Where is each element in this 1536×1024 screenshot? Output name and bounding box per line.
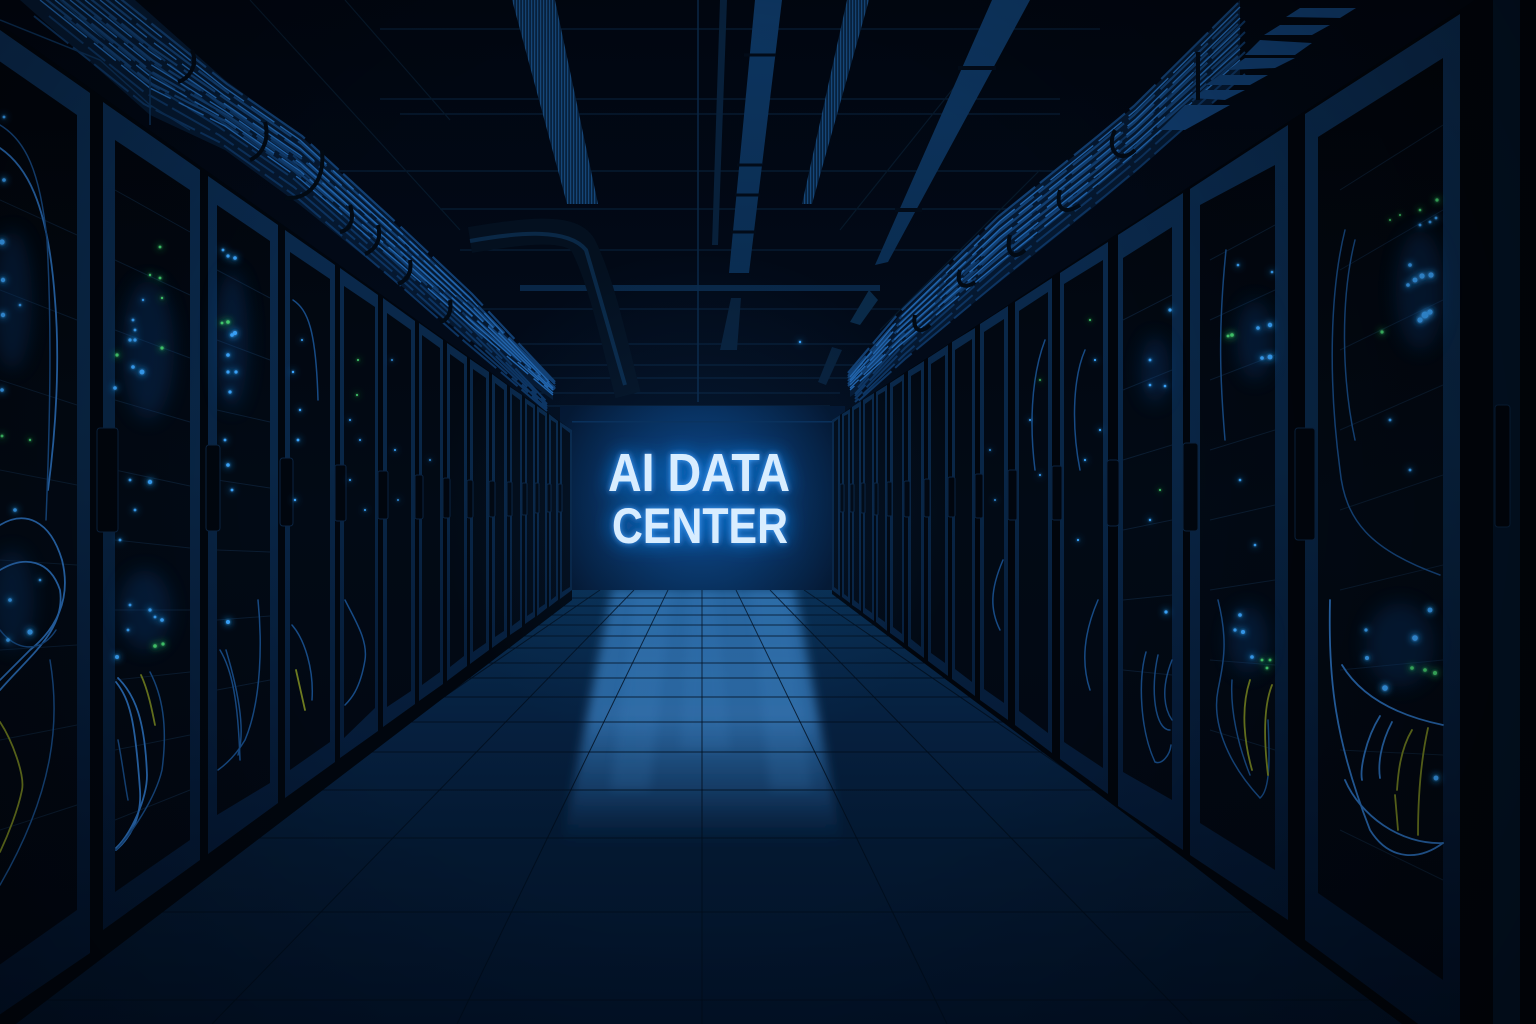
rack R7 <box>952 328 975 696</box>
right cable bundle strands <box>850 7 1240 390</box>
sign: AI DATA CENTER: CENTER <box>612 498 788 554</box>
sign: AI DATA CENTER <box>608 443 790 554</box>
right server racks <box>832 0 1520 1024</box>
rack L3 <box>208 176 278 854</box>
left cable bundle strands <box>40 0 553 395</box>
back wall <box>560 406 845 592</box>
rack L15 <box>560 422 572 599</box>
rack L10 <box>492 374 507 648</box>
rack L6 <box>383 298 415 727</box>
rack L12 <box>525 398 535 624</box>
rack L4 <box>285 230 335 798</box>
rack L2 <box>103 102 200 930</box>
left rack-top service cables <box>0 0 190 130</box>
far right beam <box>875 0 1030 265</box>
cables in left racks <box>0 125 365 885</box>
rack R13 <box>852 401 861 611</box>
rack L1 <box>0 16 90 1024</box>
rack R5 <box>1015 278 1052 753</box>
right cable ties <box>914 52 1198 330</box>
left perforated duct <box>512 0 598 204</box>
rack L7 <box>419 323 443 701</box>
left overhead cable tray <box>0 0 555 411</box>
rack R12 <box>863 393 874 621</box>
left pipe highlight <box>470 234 625 385</box>
floor tile lines <box>106 590 1294 1024</box>
right ladder tray rungs <box>1160 8 1356 130</box>
rack R9 <box>908 361 924 658</box>
sign: AI DATA CENTER: AI DATA <box>608 443 790 503</box>
left cable ties <box>178 50 451 322</box>
right overhead cable tray <box>848 0 1356 404</box>
rack R3 <box>1118 193 1183 850</box>
rack R2 <box>1190 125 1288 920</box>
rack R10 <box>890 374 904 643</box>
floor <box>16 590 1402 1024</box>
far right pipe segment <box>850 290 878 325</box>
left cable bundle under strands <box>34 16 547 411</box>
right cable bundle under strands <box>855 21 1245 404</box>
rack R8 <box>928 345 948 676</box>
server cables <box>0 125 1443 885</box>
server LEDs right <box>799 198 1439 780</box>
rack R14 <box>842 409 850 603</box>
rack R6 <box>980 306 1008 720</box>
cables in right racks <box>993 230 1443 855</box>
left cable bundle secondary strands <box>42 0 555 391</box>
rack L5 <box>340 268 378 758</box>
far right door frame <box>1493 0 1520 1024</box>
rack R1 <box>1305 14 1460 1024</box>
rack L8 <box>447 343 467 681</box>
ceiling beam <box>520 285 880 291</box>
right perforated duct <box>802 0 869 204</box>
narrow rod <box>712 0 727 245</box>
rack R11 <box>876 385 887 631</box>
left rack base <box>0 10 572 1024</box>
centre tray joints <box>731 55 776 232</box>
door handles <box>97 405 1510 540</box>
rack R15 <box>832 415 840 596</box>
central glow overlay <box>440 250 960 770</box>
ceiling <box>0 0 1536 430</box>
right rack base <box>832 0 1536 1024</box>
far right beam joints <box>895 68 996 210</box>
server light haze <box>0 230 1444 687</box>
rack L11 <box>510 387 522 635</box>
far right pipe lower <box>818 347 842 385</box>
rack L14 <box>549 414 558 607</box>
right cable bundle secondary strands <box>848 3 1238 386</box>
rack R4 <box>1060 242 1108 794</box>
left pipe <box>470 232 628 395</box>
ceiling grid lines <box>250 0 1130 406</box>
left server racks <box>0 16 572 1024</box>
rack L13 <box>537 406 547 616</box>
centre tray lower <box>720 298 741 350</box>
floor reflection <box>106 590 1294 1024</box>
rack L9 <box>470 359 489 664</box>
server LEDs left <box>0 116 431 659</box>
centre tray <box>729 0 782 273</box>
